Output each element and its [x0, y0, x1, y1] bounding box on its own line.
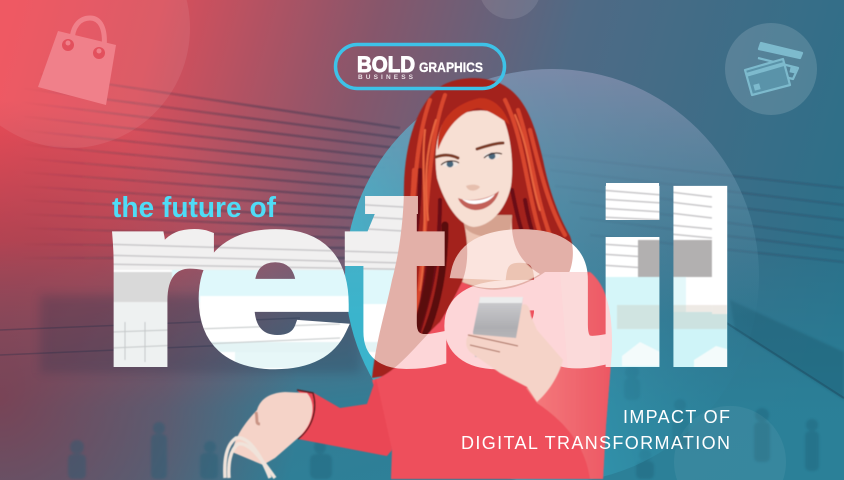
sleeve: left arm: [297, 378, 392, 456]
background: lower mall floor and railing: [0, 295, 844, 400]
fringe: [438, 98, 510, 150]
right hand: [466, 304, 563, 402]
nose: [466, 185, 480, 191]
subtitle: impact of digital transformation: IMPACT OF: [623, 407, 730, 427]
shirt: [372, 272, 612, 479]
hair back: [372, 78, 573, 378]
mouth: [458, 191, 499, 210]
tagline: the future of: the future of: [112, 192, 276, 224]
decorative circle: top centre: [481, 0, 539, 19]
face: [436, 111, 512, 227]
background: shoppers silhouettes: [68, 365, 819, 479]
neck: [462, 215, 540, 288]
icon: credit cards: [745, 43, 802, 95]
logo: Bold Business Graphics: [336, 44, 504, 88]
thumb: [256, 412, 260, 424]
eyes: [441, 153, 502, 167]
bag rope: [225, 438, 275, 478]
logo: Bold Business Graphics: BOLD: [357, 52, 415, 77]
panel: top-left circle with shopping bag: [0, 0, 190, 148]
logo: Bold Business Graphics: GRAPHICS: [419, 60, 483, 75]
decorative circle: bottom right: [674, 406, 786, 480]
logo: Bold Business Graphics: BUSINESS: [358, 74, 414, 81]
panel: large circle behind woman: [345, 69, 759, 480]
sleeve: right arm: [526, 272, 612, 479]
left hand with bag rope: [225, 392, 313, 478]
brows: [436, 143, 503, 158]
subtitle: impact of digital transformation: DIGITAL TRANSFORMATION: [461, 433, 730, 453]
subtitle: impact of digital transformation: [461, 407, 730, 453]
icon: shopping bag: [38, 18, 116, 105]
panel: top-right circle with credit cards: [725, 23, 817, 115]
hand holding phone: [466, 297, 563, 402]
phone: [473, 297, 523, 358]
hair strands: [386, 95, 565, 368]
woman figure: [297, 78, 612, 479]
background: mall building stripes: [20, 74, 844, 262]
headline word: retail: retail: [102, 151, 739, 410]
headline word: retail: [112, 183, 728, 370]
hand: [232, 392, 313, 465]
